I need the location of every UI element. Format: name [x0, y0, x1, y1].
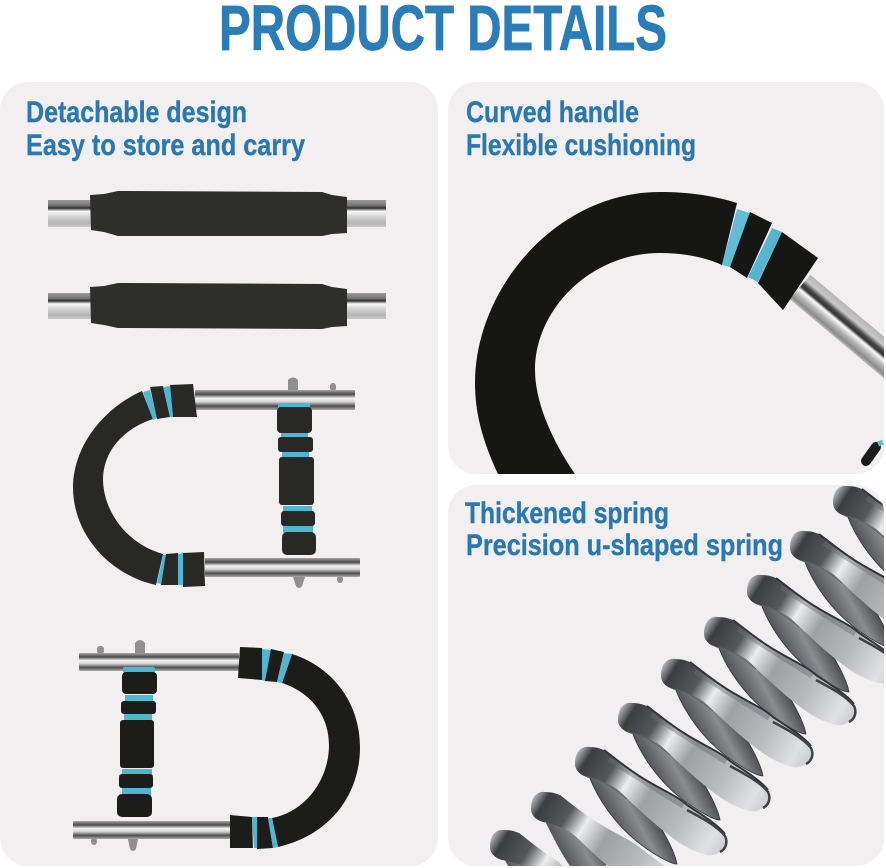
heading: detachable design: Detachable design: [26, 96, 247, 129]
heading: thickened spring: Precision u-shaped spring: [466, 529, 783, 562]
heading: detachable design: [26, 96, 305, 162]
heading: curved handle: [466, 96, 696, 162]
panel: thickened spring: [448, 485, 886, 866]
heading: detachable design: Easy to store and carry: [26, 129, 305, 162]
close-up of curved foam handle and rod: [475, 192, 886, 474]
spring front strands: [490, 486, 886, 866]
panel: curved handle: [448, 82, 886, 474]
heading: curved handle: Flexible cushioning: [466, 129, 696, 162]
assembled handle, opening right: [73, 378, 360, 588]
heading: curved handle: Curved handle: [466, 96, 639, 129]
assembled handle, opening left: [73, 640, 360, 851]
panel: detachable design: [0, 82, 438, 866]
straight foam bar one: [48, 191, 386, 236]
heading: thickened spring: Thickened spring: [465, 497, 669, 530]
heading: thickened spring: [465, 497, 783, 562]
straight foam bar two: [48, 283, 386, 329]
spring back strands: [504, 515, 886, 866]
metal coil spring: [490, 486, 884, 866]
